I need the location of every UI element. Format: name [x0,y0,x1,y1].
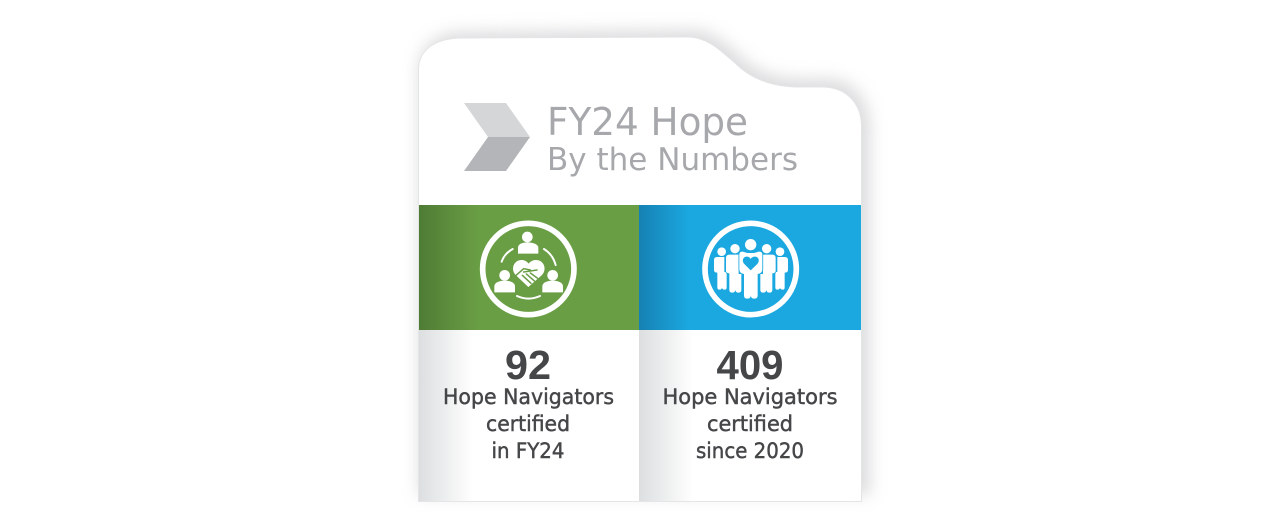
stat: 92: Hope Navigators [443,385,614,409]
panel: blue band [639,205,861,330]
title: By the Numbers [547,142,798,178]
title: FY24 Hope [547,100,748,144]
title [547,100,798,178]
stat: 409: Hope Navigators [662,385,838,409]
stat: 92: in FY24 [492,439,564,463]
stat: 409 [662,342,838,463]
panel: right stat background [639,330,693,501]
stat: 92: 92 [505,342,551,388]
card [418,37,862,502]
stat: 409: certified [707,412,793,436]
panel: left stat background [419,330,473,501]
card shadow [419,30,870,495]
icon: people around handshake heart [483,223,574,315]
header chevron icon [464,103,530,171]
panel: green band [419,205,639,330]
stat: 92: certified [486,412,570,436]
stat: 409: 409 [716,342,784,388]
stat: 409: since 2020 [696,439,804,463]
stat: 92 [443,342,614,463]
icon: group of people with heart [705,223,796,315]
